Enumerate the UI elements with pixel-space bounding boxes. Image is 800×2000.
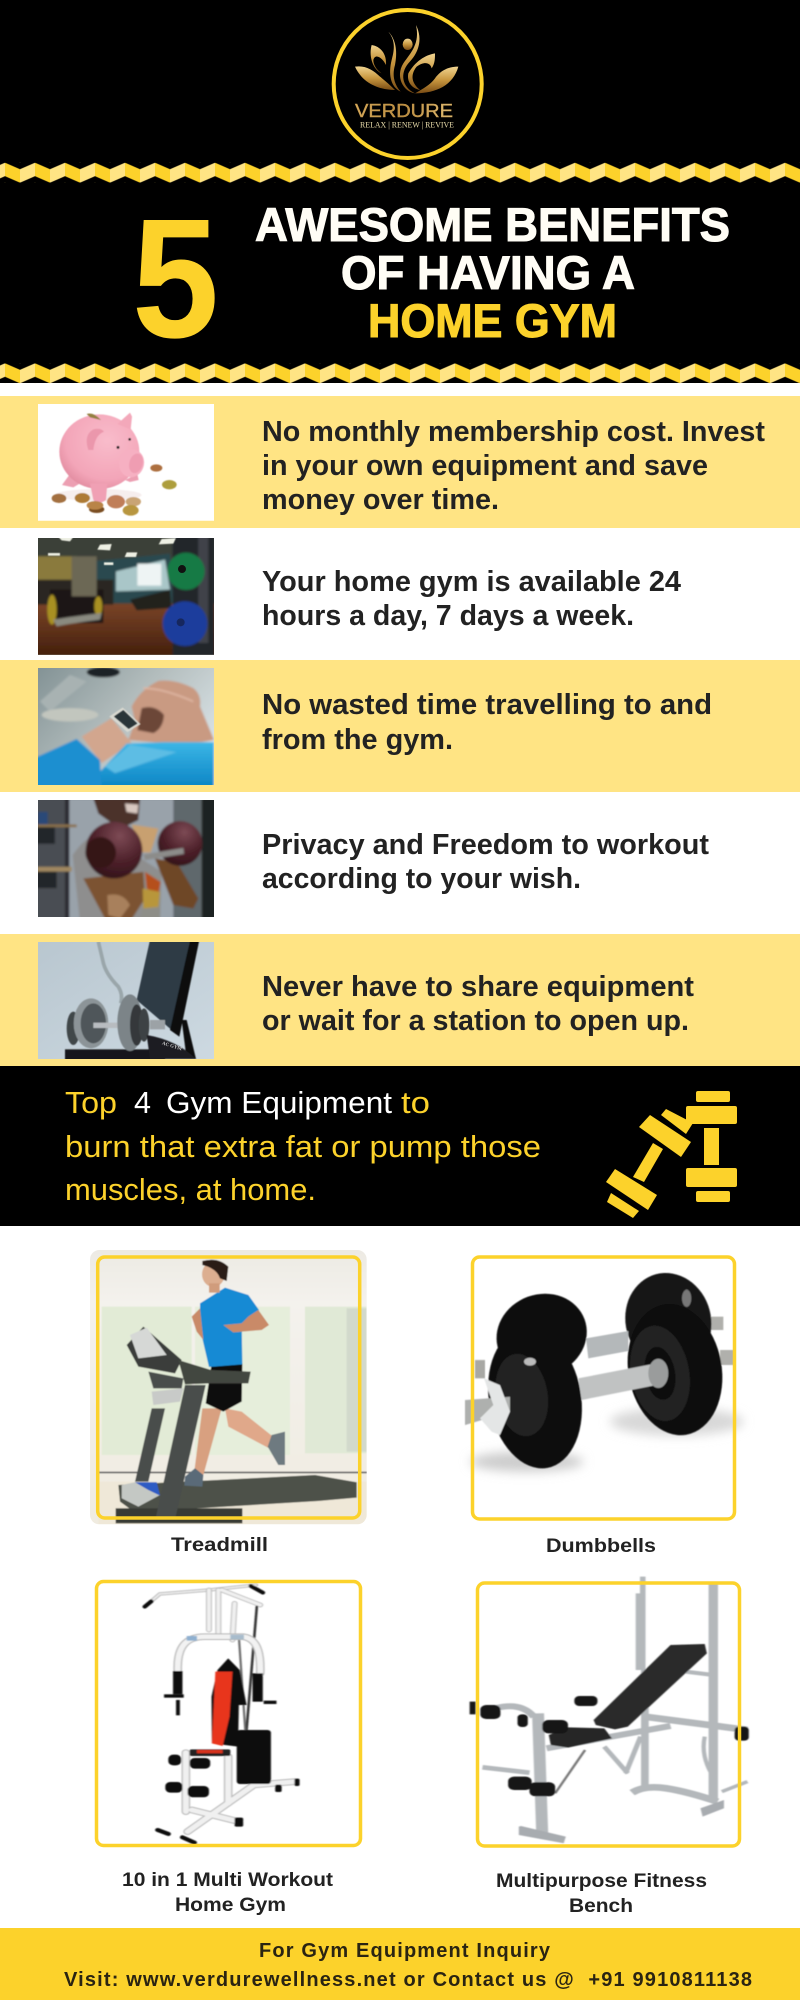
header: black band with logo and title <box>0 0 800 383</box>
panel: benefit 5 <box>0 934 800 1073</box>
equipment: multipurpose bench <box>470 1577 749 1917</box>
label: bench <box>496 1870 707 1917</box>
benefit 2 text <box>262 566 681 632</box>
benefit 2 text: hours a day, 7 days a week. <box>262 600 634 632</box>
label: dumbbells: Dumbbells <box>546 1535 656 1557</box>
arms <box>223 1310 269 1332</box>
benefit 4 text <box>262 829 710 895</box>
title: AWESOME BENEFITS <box>255 198 730 251</box>
banner text <box>65 1085 541 1207</box>
label: home gym <box>122 1869 334 1916</box>
front leg <box>194 1408 222 1475</box>
photo: gym interior <box>38 538 214 655</box>
equipment: dumbbells <box>465 1257 743 1557</box>
banner text: burn that extra fat or pump those <box>65 1129 541 1164</box>
title: HOME GYM <box>368 294 617 347</box>
benefit 5 text <box>262 971 695 1037</box>
benefit 1 text: No monthly membership cost. Invest <box>262 416 766 448</box>
frame: bench <box>478 1583 740 1846</box>
equipment: treadmill <box>85 1245 375 1556</box>
photo: pair of dumbbells <box>465 1263 743 1476</box>
footer text: For Gym Equipment Inquiry <box>259 1940 551 1962</box>
photo: home gym machine <box>145 1585 300 1843</box>
label: bench: Multipurpose Fitness <box>496 1870 707 1892</box>
icon: gold lotus figure <box>355 25 458 93</box>
head <box>202 1265 224 1286</box>
photo: dumbbell and bench <box>38 942 214 1059</box>
back leg <box>225 1408 275 1448</box>
photo: piggy bank <box>38 404 214 521</box>
benefit 3 text: from the gym. <box>262 724 453 756</box>
benefit 1 text: money over time. <box>262 484 499 516</box>
panel: benefit 4 <box>30 798 710 932</box>
panel: benefit 2 <box>30 533 681 666</box>
logo tagline: RELAX | RENEW | REVIVE <box>360 120 454 130</box>
photo: dumbbell and bench: AC GYM <box>161 1041 183 1052</box>
main column <box>156 1385 206 1517</box>
benefit 3 text: No wasted time travelling to and <box>262 689 712 721</box>
benefit 1 text <box>262 416 766 516</box>
banner text: Gym Equipment <box>166 1085 392 1120</box>
label: treadmill: Treadmill <box>171 1534 268 1556</box>
banner text: 4 <box>134 1085 151 1120</box>
benefit 3 text <box>262 689 712 756</box>
big number 5: 5 <box>132 184 219 374</box>
zigzag border bottom <box>0 363 800 383</box>
benefit 5 text: Never have to share equipment <box>262 971 695 1003</box>
equipment: multi workout home gym <box>96 1582 360 1916</box>
frame: dumbbells <box>472 1257 734 1519</box>
benefit 1 text: in your own equipment and save <box>262 450 708 482</box>
footer text: Visit: www.verdurewellness.net or Contact us @ +91 9910811138 <box>64 1969 752 1991</box>
label: home gym: Home Gym <box>175 1894 286 1916</box>
photo: fitness bench <box>470 1577 749 1843</box>
icon: dumbbells <box>606 1091 737 1218</box>
footer: contact band <box>0 1928 800 2000</box>
photo: man lifting kettlebells <box>38 800 214 917</box>
benefit 4 text: according to your wish. <box>262 863 581 895</box>
panel: benefit 1 <box>0 396 800 533</box>
logo: Verdure badge <box>334 10 482 158</box>
label: bench: Bench <box>569 1895 633 1917</box>
logo wordmark: VERDURE <box>355 100 453 121</box>
title <box>255 198 730 347</box>
benefit 2 text: Your home gym is available 24 <box>262 566 681 598</box>
footer text <box>64 1940 752 1991</box>
banner text: Top <box>65 1085 117 1120</box>
benefit 5 text: or wait for a station to open up. <box>262 1005 689 1037</box>
frame: home gym <box>96 1582 360 1846</box>
rear column <box>135 1408 165 1482</box>
zigzag border top <box>0 163 800 183</box>
banner text: to <box>401 1085 430 1120</box>
torso <box>200 1288 259 1367</box>
panel: benefit 3 <box>0 660 800 798</box>
benefit 4 text: Privacy and Freedom to workout <box>262 829 710 861</box>
panel: equipment banner <box>0 1066 800 1226</box>
banner text: muscles, at home. <box>65 1172 316 1207</box>
photo: man on treadmill <box>90 1250 367 1524</box>
label: home gym: 10 in 1 Multi Workout <box>122 1869 334 1891</box>
photo: smart watch on wrist <box>38 668 214 785</box>
title: OF HAVING A <box>341 246 635 299</box>
shorts <box>206 1363 242 1412</box>
frame: treadmill <box>98 1257 360 1518</box>
